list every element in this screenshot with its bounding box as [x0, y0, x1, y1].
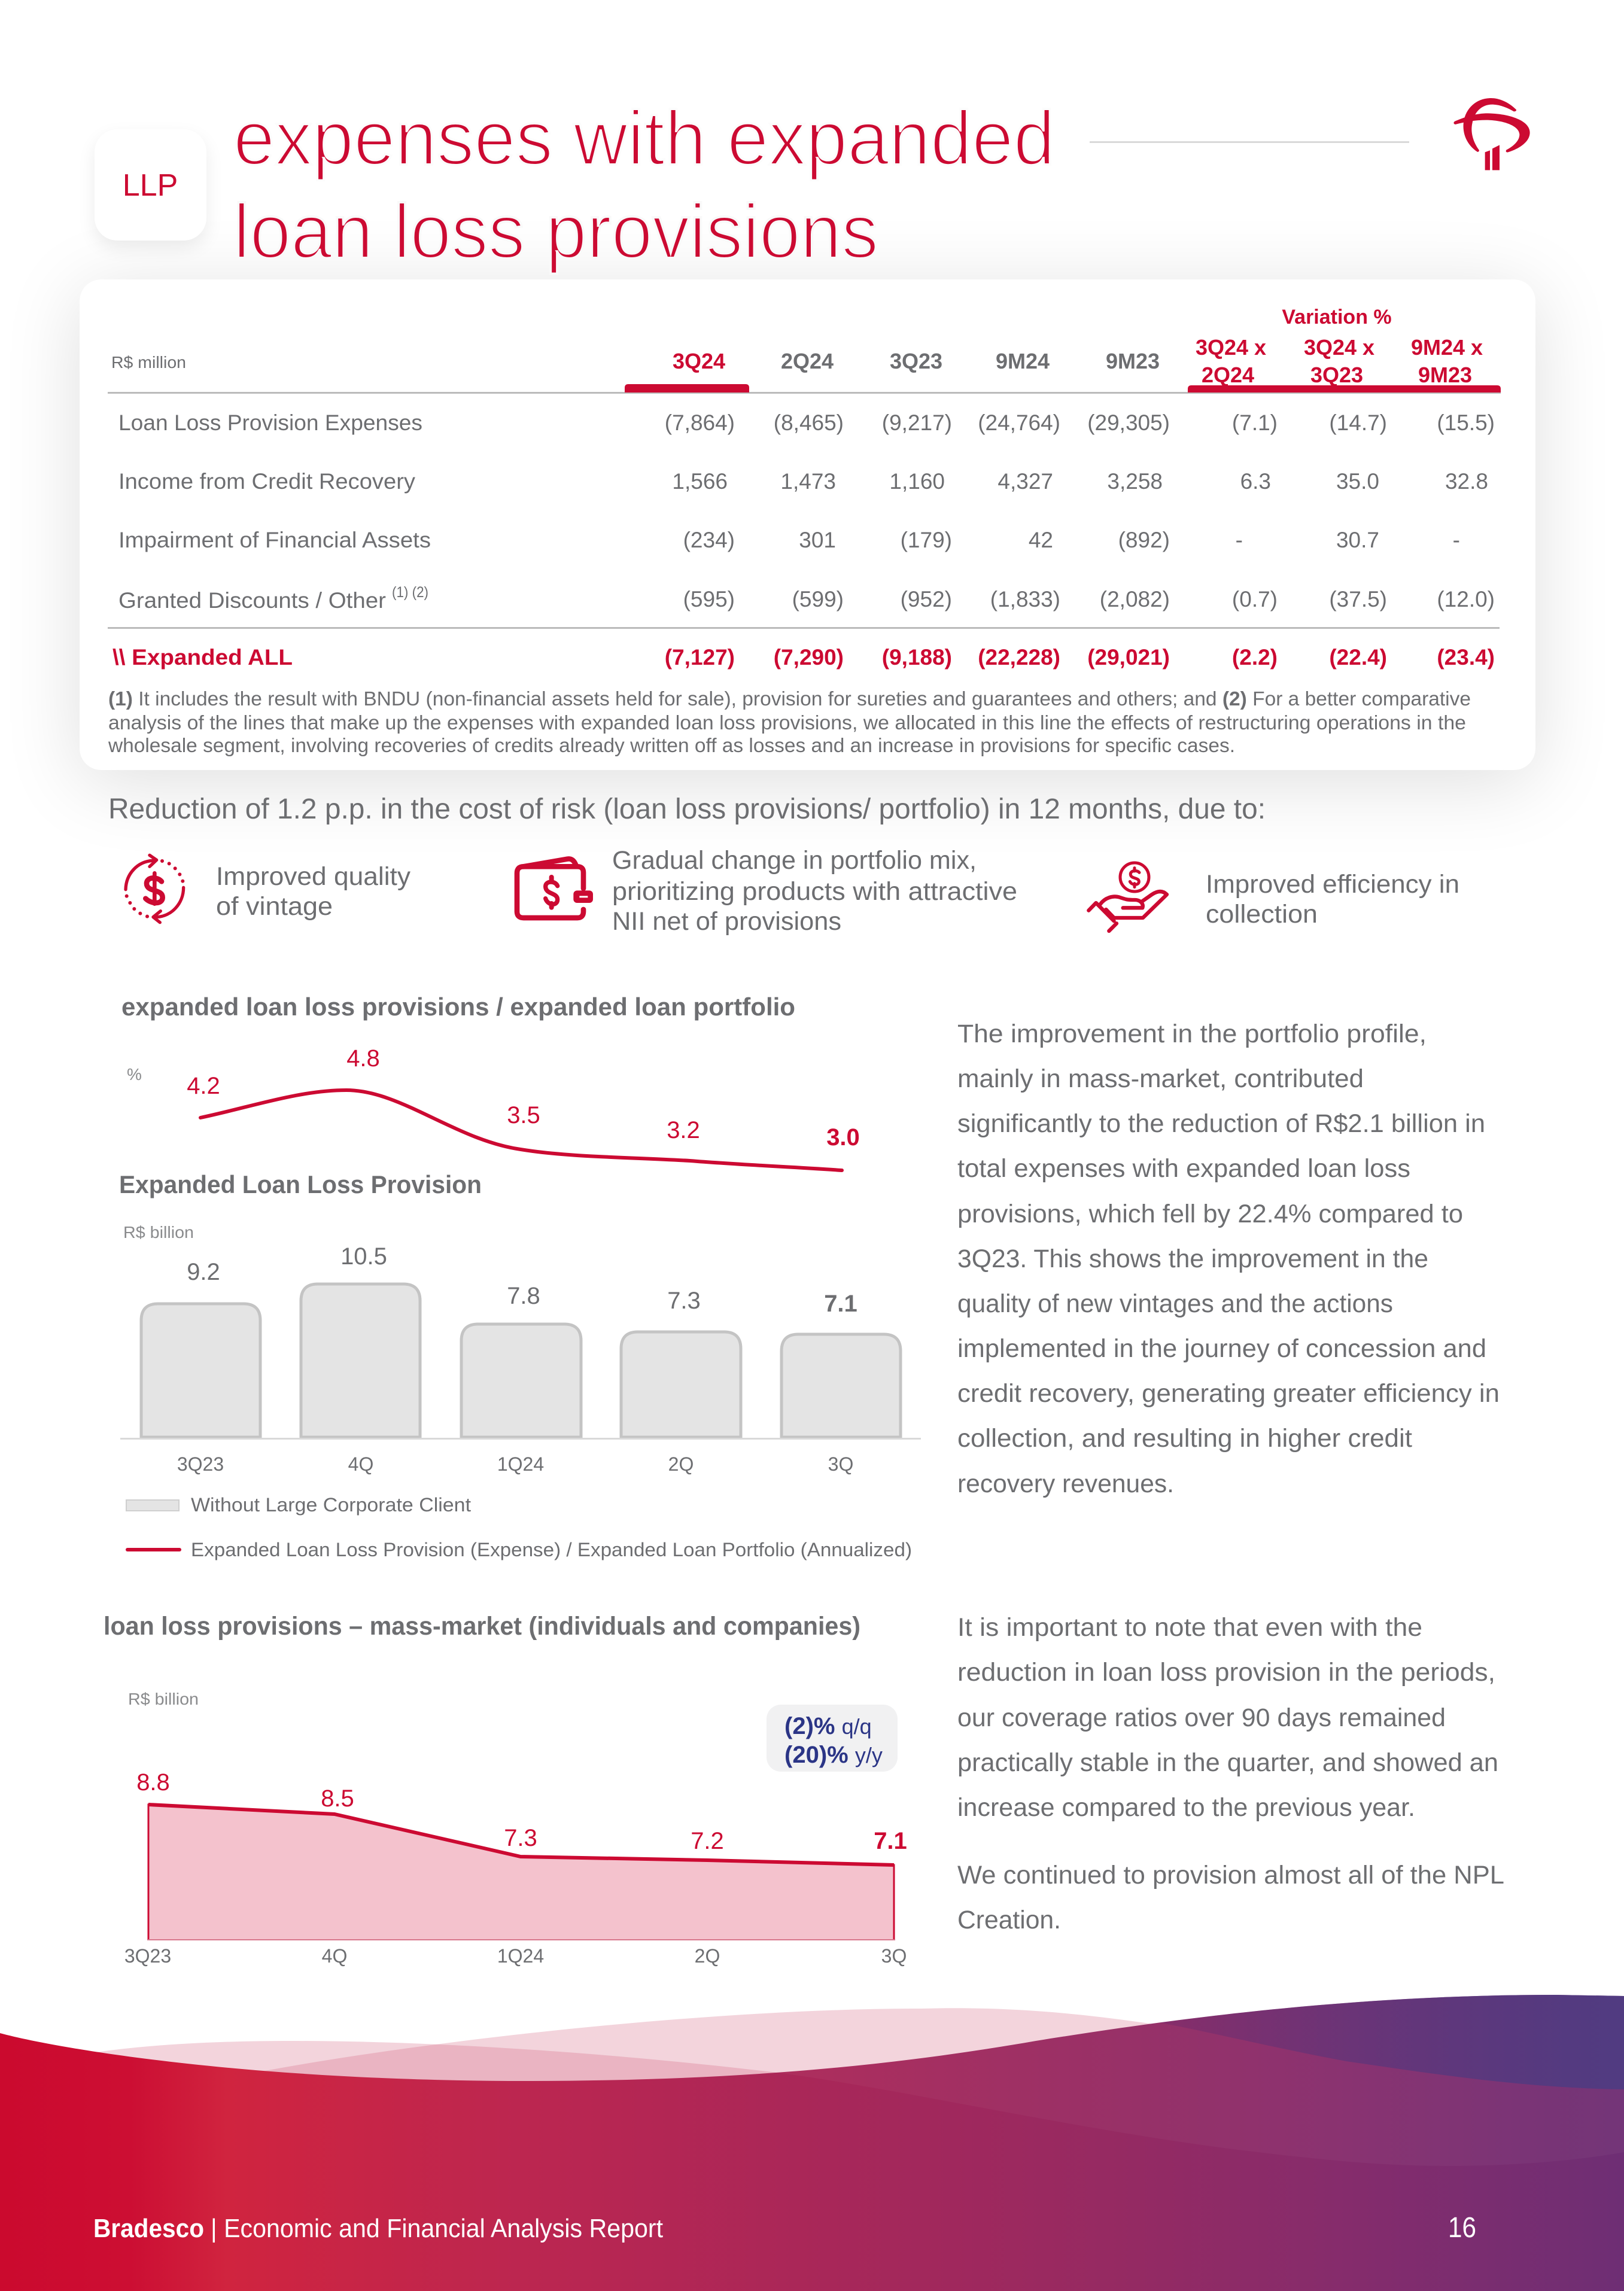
row: Income from Credit Recovery: 35.0 — [1336, 469, 1379, 494]
row: Granted Discounts / Other: (2,082) — [1100, 587, 1170, 611]
row: Income from Credit Recovery: 32.8 — [1445, 469, 1488, 494]
row: Income from Credit Recovery — [118, 469, 1488, 494]
paragraph: portfolio profile improvement: mainly in mass-market, contributed — [957, 1064, 1364, 1093]
row: Granted Discounts / Other: (1,833) — [990, 587, 1060, 611]
axis labels: 3Q — [828, 1453, 853, 1475]
row: Expanded ALL total: (29,021) — [1087, 645, 1170, 670]
row: Impairment of Financial Assets: 301 — [799, 528, 836, 552]
paragraph: portfolio profile improvement: total expenses with expanded loan loss — [957, 1154, 1410, 1183]
row: Impairment of Financial Assets: (179) — [901, 528, 952, 552]
row: Income from Credit Recovery: 1,566 — [672, 469, 728, 494]
table header — [108, 306, 1501, 394]
heading: Expanded Loan Loss Provision: Expanded Loan Loss Provision — [119, 1170, 482, 1198]
row: Income from Credit Recovery: 1,160 — [889, 469, 945, 494]
table header: 2Q24 — [781, 349, 834, 373]
icon: Bradesco logo — [1453, 98, 1530, 170]
header: variation columns: Variation % — [1282, 306, 1392, 328]
area axis labels: 3Q — [881, 1945, 907, 1967]
area axis labels: 1Q24 — [497, 1945, 544, 1967]
header: variation columns: 3Q23 — [1310, 363, 1363, 387]
table footnote — [108, 687, 1471, 756]
line chart: cost of risk — [127, 1045, 860, 1170]
table footnote: (1) It includes the result with BNDU (non-financial assets held for sale), provision for sureties and guarantees and others; and (2) For a better comparative — [108, 687, 1471, 710]
row: Loan Loss Provision Expenses: (8,465) — [774, 410, 844, 435]
panel: table card background — [80, 279, 1535, 770]
row: Granted Discounts / Other: (952) — [901, 587, 952, 611]
table header: R$ million — [111, 353, 186, 372]
header: variation columns: 2Q24 — [1202, 363, 1254, 387]
callout: growth rates: (20)% y/y — [784, 1742, 883, 1768]
row: Income from Credit Recovery: 1,473 — [780, 469, 836, 494]
row: Impairment of Financial Assets: Impairment of Financial Assets — [118, 528, 431, 552]
row: Loan Loss Provision Expenses: (7,864) — [665, 410, 735, 435]
bar values: 10.5 — [340, 1243, 387, 1270]
footer text: | Economic and Financial Analysis Report — [211, 2214, 663, 2243]
data labels: 4.8 — [346, 1045, 380, 1072]
paragraph: coverage ratios: our coverage ratios over 90 days remained — [957, 1703, 1446, 1732]
header: variation columns: 9M23 — [1418, 363, 1472, 387]
row: Income from Credit Recovery: 4,327 — [997, 469, 1053, 494]
area axis labels: 4Q — [322, 1945, 347, 1967]
row: Granted Discounts / Other: (37.5) — [1329, 587, 1387, 611]
row: Granted Discounts / Other: (12.0) — [1437, 587, 1495, 611]
paragraph: portfolio profile improvement: quality of new vintages and the actions — [957, 1289, 1393, 1318]
bar values: 7.3 — [667, 1288, 701, 1314]
icon: wallet — [517, 859, 593, 918]
paragraph: portfolio profile improvement: The improvement in the portfolio profile, — [957, 1020, 1427, 1048]
bar values: 7.1 — [824, 1291, 857, 1317]
paragraph: coverage ratios — [957, 1613, 1504, 1934]
area values: 8.5 — [321, 1785, 354, 1812]
area values — [136, 1769, 907, 1854]
row: Loan Loss Provision Expenses: Loan Loss Provision Expenses — [118, 410, 422, 435]
row: Loan Loss Provision Expenses: (14.7) — [1329, 410, 1387, 435]
table header: 9M24 — [996, 349, 1050, 373]
title: expenses with expanded — [233, 96, 1055, 181]
paragraph: portfolio profile improvement: provisions, which fell by 22.4% compared to — [957, 1200, 1463, 1228]
axis labels: 1Q24 — [497, 1453, 544, 1475]
panel: LLP badge background — [95, 129, 206, 241]
row: Loan Loss Provision Expenses: (24,764) — [978, 410, 1060, 435]
row: Expanded ALL total: (9,188) — [882, 645, 952, 670]
row: Expanded ALL total: \\ Expanded ALL — [112, 645, 293, 670]
axis labels: 2Q — [668, 1453, 694, 1475]
badge label: LLP: LLP — [123, 168, 178, 203]
table footnote: analysis of the lines that make up the expenses with expanded loan loss provisions, we allocated in this line the effects of restructuring operations in the — [108, 711, 1466, 734]
axis labels: 3Q23 — [177, 1453, 224, 1475]
area chart: mass-market loan loss provisions — [124, 1690, 907, 1967]
area axis labels — [124, 1945, 907, 1967]
row: Granted Discounts / Other: (599) — [792, 587, 844, 611]
subheading: cost of risk: Reduction of 1.2 p.p. in the cost of risk (loan loss provisions/ portfolio) in 12 months, due to: — [108, 793, 1266, 825]
row: Expanded ALL total: (22,228) — [978, 645, 1060, 670]
text: improved efficiency in collection — [1206, 870, 1459, 929]
icon: hand with coin — [1088, 863, 1167, 931]
row: Granted Discounts / Other: (595) — [683, 587, 735, 611]
row: Granted Discounts / Other: (0.7) — [1232, 587, 1278, 611]
row: Loan Loss Provision Expenses: (29,305) — [1087, 410, 1170, 435]
paragraph: portfolio profile improvement: significantly to the reduction of R$2.1 billion in — [957, 1109, 1485, 1138]
table header: 3Q23 — [890, 349, 942, 373]
page number: 16 — [1448, 2212, 1476, 2244]
row: Expanded ALL total: (2.2) — [1232, 645, 1278, 670]
row: Expanded ALL total: (7,127) — [665, 645, 735, 670]
bar chart: expanded loan loss provision — [120, 1223, 921, 1475]
paragraph: portfolio profile improvement: collection, and resulting in higher credit — [957, 1424, 1412, 1453]
text: improved quality of vintage: Improved quality — [216, 862, 411, 891]
row: Granted Discounts / Other: Granted Discounts / Other — [118, 588, 386, 613]
line chart: cost of risk: % — [127, 1065, 142, 1084]
area axis labels: 3Q23 — [124, 1945, 171, 1967]
icon: dollar cycle — [126, 855, 184, 923]
paragraph: coverage ratios: It is important to note that even with the — [957, 1613, 1422, 1642]
header: variation columns: 3Q24 x — [1304, 335, 1374, 360]
data labels: 3.5 — [507, 1102, 540, 1128]
row: Impairment of Financial Assets: - — [1236, 528, 1243, 552]
table footnote: wholesale segment, involving recoveries of credits already written off as losses and an increase in provisions for specific cases. — [108, 734, 1235, 756]
text: gradual change in portfolio mix: Gradual change in portfolio mix, — [612, 846, 977, 875]
row: Impairment of Financial Assets: 30.7 — [1336, 528, 1379, 552]
text: gradual change in portfolio mix — [612, 846, 1017, 936]
row: Impairment of Financial Assets: (892) — [1118, 528, 1170, 552]
legend: Expanded Loan Loss Provision (Expense) / Expanded Loan Portfolio (Annualized) — [191, 1539, 912, 1560]
row: Loan Loss Provision Expenses — [118, 410, 1495, 435]
row: Impairment of Financial Assets: (234) — [683, 528, 735, 552]
text: improved quality of vintage — [216, 862, 411, 921]
title: loan loss provisions — [233, 189, 878, 275]
row: Loan Loss Provision Expenses: (7.1) — [1232, 410, 1278, 435]
area values: 7.2 — [691, 1828, 724, 1854]
data labels: 3.2 — [667, 1117, 700, 1143]
header: variation columns: 3Q24 x — [1196, 335, 1266, 360]
text: gradual change in portfolio mix: prioritizing products with attractive — [612, 877, 1017, 906]
legend: Without Large Corporate Client — [191, 1494, 471, 1516]
paragraph: portfolio profile improvement: recovery revenues. — [957, 1469, 1174, 1498]
footer text: Bradesco — [93, 2214, 204, 2243]
paragraph: portfolio profile improvement — [957, 1020, 1500, 1498]
row: Granted Discounts / Other: (1) (2) — [392, 584, 428, 601]
row: Expanded ALL total: (7,290) — [774, 645, 844, 670]
row: Loan Loss Provision Expenses: (15.5) — [1437, 410, 1495, 435]
area axis labels: 2Q — [695, 1945, 720, 1967]
paragraph: coverage ratios: reduction in loan loss provision in the periods, — [957, 1658, 1495, 1687]
row: Expanded ALL total: (23.4) — [1437, 645, 1495, 670]
bar values: 9.2 — [187, 1259, 220, 1285]
header: 3Q24: 3Q24 — [673, 349, 725, 373]
text: gradual change in portfolio mix: NII net of provisions — [612, 907, 841, 936]
header rule — [1090, 141, 1409, 143]
paragraph: coverage ratios: We continued to provision almost all of the NPL — [957, 1861, 1504, 1890]
row: Expanded ALL total — [112, 645, 1495, 670]
legend — [126, 1494, 912, 1560]
paragraph: portfolio profile improvement: credit recovery, generating greater efficiency in — [957, 1379, 1500, 1408]
bar values — [187, 1243, 857, 1317]
callout: growth rates: (2)% q/q — [784, 1713, 872, 1739]
area values: 7.1 — [874, 1828, 907, 1854]
area values: 7.3 — [504, 1825, 537, 1851]
heading: expanded loan loss provisions / portfolio: expanded loan loss provisions / expanded loan portfolio — [121, 993, 795, 1021]
footer wave background — [0, 1974, 1624, 2291]
paragraph: coverage ratios: increase compared to the previous year. — [957, 1793, 1415, 1822]
paragraph: coverage ratios: Creation. — [957, 1906, 1061, 1934]
header: variation columns: 9M24 x — [1411, 335, 1483, 360]
data labels — [187, 1045, 860, 1151]
data labels: 4.2 — [187, 1073, 220, 1099]
text: improved efficiency in collection: Improved efficiency in — [1206, 870, 1459, 899]
row: Impairment of Financial Assets: - — [1453, 528, 1460, 552]
row: Income from Credit Recovery: Income from Credit Recovery — [118, 469, 416, 494]
row: Income from Credit Recovery: 3,258 — [1107, 469, 1163, 494]
paragraph: portfolio profile improvement: 3Q23. This shows the improvement in the — [957, 1245, 1428, 1273]
heading: loan loss provisions mass-market: loan loss provisions – mass-market (individuals and companies) — [104, 1612, 860, 1641]
area values: 8.8 — [136, 1769, 170, 1796]
title — [233, 96, 1055, 275]
table header: 9M23 — [1106, 349, 1160, 373]
bar values: 7.8 — [507, 1283, 540, 1309]
row: Loan Loss Provision Expenses: (9,217) — [882, 410, 952, 435]
row: Granted Discounts / Other — [118, 584, 1495, 613]
row: Expanded ALL total: (22.4) — [1329, 645, 1387, 670]
paragraph: coverage ratios: practically stable in the quarter, and showed an — [957, 1748, 1498, 1777]
axis labels — [177, 1453, 853, 1475]
row: Impairment of Financial Assets — [118, 528, 1460, 552]
row: Impairment of Financial Assets: 42 — [1029, 528, 1053, 552]
callout: growth rates — [767, 1705, 898, 1772]
area chart: mass-market loan loss provisions: R$ billion — [128, 1690, 199, 1708]
data labels: 3.0 — [826, 1124, 860, 1151]
header: variation columns — [1196, 306, 1483, 387]
text: improved quality of vintage: of vintage — [216, 892, 333, 921]
axis labels: 4Q — [348, 1453, 373, 1475]
text: improved efficiency in collection: collection — [1206, 900, 1318, 929]
row: Income from Credit Recovery: 6.3 — [1240, 469, 1271, 494]
paragraph: portfolio profile improvement: implemented in the journey of concession and — [957, 1334, 1486, 1363]
bar chart: expanded loan loss provision: R$ billion — [123, 1223, 194, 1242]
